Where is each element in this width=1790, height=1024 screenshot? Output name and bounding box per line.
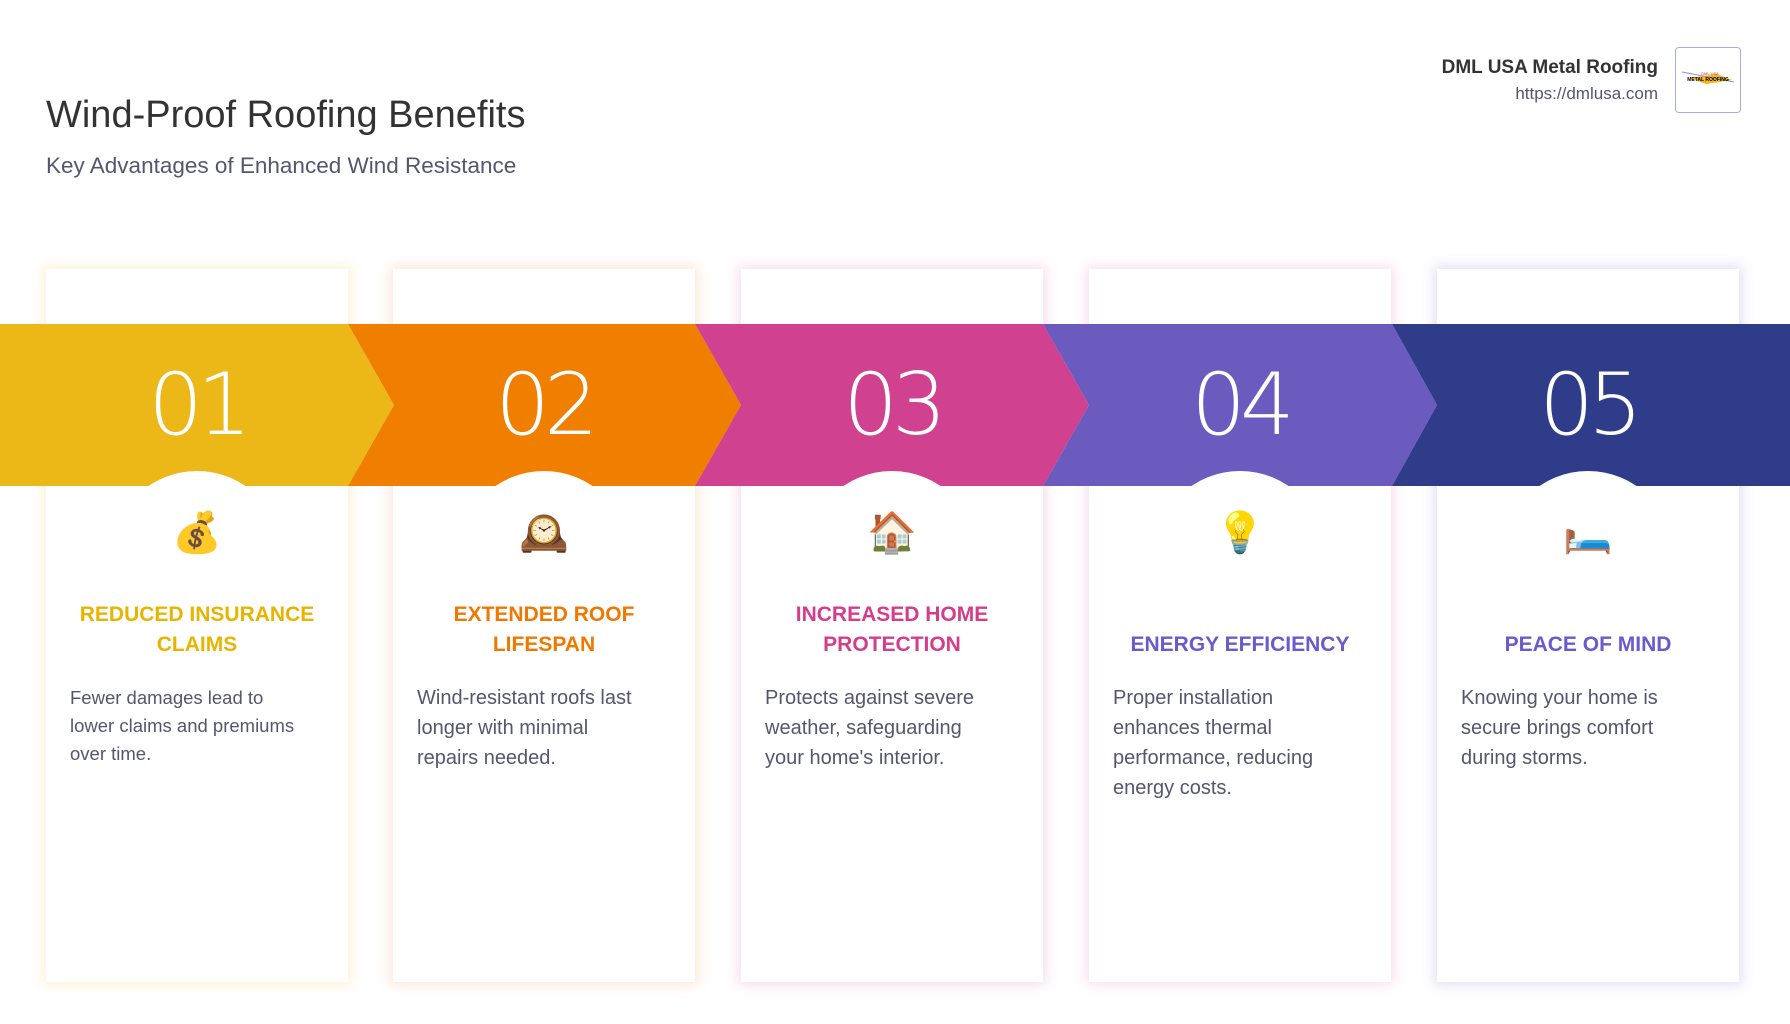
number 03: 03 <box>843 355 941 455</box>
icon: clock: 🕰️ <box>519 509 569 556</box>
text 2: Wind-resistant roofs last longer with minimal repairs needed. <box>417 687 632 769</box>
card 5 <box>1437 269 1739 982</box>
brand block <box>1442 47 1741 113</box>
logo <box>1675 47 1741 113</box>
card 3 <box>741 269 1043 982</box>
card 4 <box>1089 269 1391 982</box>
number 02: 02 <box>495 355 593 455</box>
heading 4: ENERGY EFFICIENCY <box>1130 633 1349 656</box>
card 2 <box>393 269 695 982</box>
panel 5 content <box>1461 509 1671 769</box>
icon: bulb: 💡 <box>1215 509 1265 556</box>
text 1: Fewer damages lead to lower claims and premiums over time. <box>70 687 294 764</box>
circles <box>111 471 283 643</box>
panel 1 content <box>70 509 314 764</box>
icon: bed: 🛏️ <box>1563 509 1613 556</box>
chevron band <box>0 324 1790 486</box>
number 05: 05 <box>1539 355 1637 455</box>
title: Wind-Proof Roofing Benefits <box>46 94 525 136</box>
panel 4 content <box>1113 509 1350 799</box>
text 4: Proper installation enhances thermal performance, reducing energy costs. <box>1113 687 1313 799</box>
text 5: Knowing your home is secure brings comfort during storms. <box>1461 687 1658 769</box>
panel 3 content <box>765 509 988 769</box>
icon: house: 🏠 <box>867 509 917 556</box>
brand name: DML USA Metal Roofing <box>1442 57 1658 78</box>
text 3: Protects against severe weather, safeguarding your home's interior. <box>765 687 974 769</box>
icon: money bag: 💰 <box>172 509 222 556</box>
panel 2 content <box>417 509 634 769</box>
number 01: 01 <box>148 355 246 455</box>
card 1 <box>46 269 348 982</box>
number 04: 04 <box>1191 355 1289 455</box>
brand url: https://dmlusa.com <box>1515 84 1658 103</box>
heading 5: PEACE OF MIND <box>1505 633 1671 656</box>
subtitle: Key Advantages of Enhanced Wind Resistance <box>46 153 516 178</box>
heading 3: INCREASED HOME PROTECTION <box>796 603 988 656</box>
logo: DML USA <box>1701 71 1719 76</box>
heading 2: EXTENDED ROOF LIFESPAN <box>454 603 634 656</box>
logo: METAL ROOFING <box>1687 77 1729 83</box>
heading 1: REDUCED INSURANCE CLAIMS <box>80 603 314 656</box>
